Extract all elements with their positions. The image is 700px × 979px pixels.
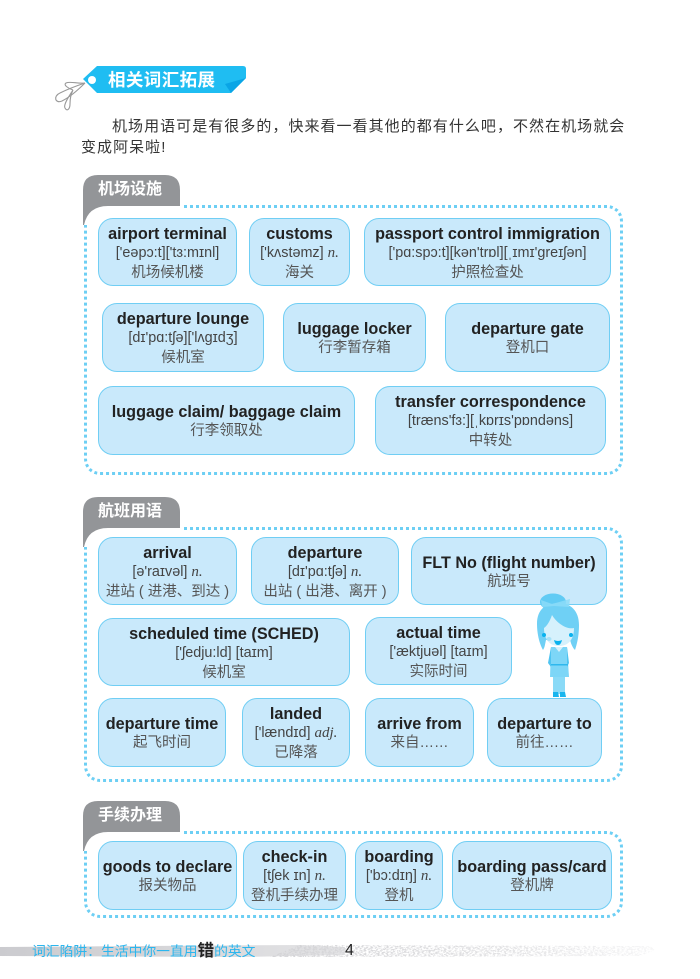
card: airport terminal — [98, 218, 237, 286]
tab: flight terms — [83, 497, 181, 547]
intro paragraph — [81, 118, 625, 156]
card: departure gate — [445, 303, 610, 372]
card: passport control immigration: 护照检查处 — [451, 265, 524, 281]
intro paragraph: 机场用语可是有很多的，快来看一看其他的都有什么吧，不然在机场就会 — [112, 118, 625, 135]
card: boarding: boarding — [364, 848, 434, 866]
card: check-in — [243, 841, 346, 910]
card: customs: customs — [266, 225, 333, 243]
card: scheduled time — [98, 618, 350, 686]
card: departure to: 前往…… — [516, 735, 574, 751]
footer brush stroke — [0, 945, 654, 957]
card: boarding: 登机 — [384, 888, 414, 904]
card: goods to declare — [98, 841, 237, 910]
tab: flight terms: 航班用语 — [98, 503, 162, 520]
card: transfer correspondence: transfer correspondence — [395, 393, 586, 411]
card: departure lounge: 候机室 — [161, 350, 205, 366]
card: luggage claim — [98, 386, 355, 455]
card: departure time — [98, 698, 226, 767]
card: check-in: check-in — [262, 848, 327, 866]
card: landed — [242, 698, 350, 767]
card: departure: 出站 ( 出港、离开 ) — [263, 584, 387, 600]
card: scheduled time: 候机室 — [202, 665, 246, 681]
card: arrive from: 来自…… — [390, 735, 448, 751]
card: arrival: arrival — [143, 544, 192, 562]
footer title: 词汇陷阱：生活中你一直用错的英文 — [32, 942, 255, 960]
card: boarding — [355, 841, 443, 910]
card: departure lounge: [dɪ'pɑ:tʃə]['lʌgɪdʒ] — [128, 330, 238, 346]
card: check-in: [tʃek ɪn] n. — [263, 868, 326, 884]
icon: flight attendant girl — [537, 594, 579, 697]
card: departure: [dɪ'pɑ:tʃə] n. — [288, 564, 362, 580]
card: passport control immigration: passport control immigration — [375, 225, 600, 243]
card: arrive from — [365, 698, 474, 767]
card: airport terminal: airport terminal — [108, 225, 227, 243]
card: luggage claim: 行李领取处 — [190, 423, 263, 439]
card: airport terminal: 机场候机楼 — [131, 265, 204, 281]
tab: airport facilities — [83, 175, 181, 225]
card: boarding pass/card: 登机牌 — [510, 878, 554, 894]
card: luggage locker: 行李暂存箱 — [318, 340, 391, 356]
card: luggage claim: luggage claim/ baggage claim — [112, 403, 341, 421]
card: passport control immigration — [364, 218, 611, 286]
card: FLT No — [411, 537, 607, 605]
card: luggage locker — [283, 303, 426, 372]
card: goods to declare: goods to declare — [103, 858, 232, 876]
card: departure to — [487, 698, 602, 767]
card: arrival — [98, 537, 237, 605]
tab: check-in procedures — [83, 801, 181, 851]
card: boarding: ['bɔ:dɪŋ] n. — [366, 868, 432, 884]
card: customs — [249, 218, 350, 286]
card: customs: 海关 — [285, 265, 314, 281]
card: actual time — [365, 617, 512, 685]
heading text: 相关词汇拓展 — [108, 70, 215, 90]
card: departure — [251, 537, 399, 605]
card: boarding pass/card — [452, 841, 612, 910]
card: departure: departure — [288, 544, 362, 562]
card: arrival: 进站 ( 进港、到达 ) — [106, 584, 229, 600]
card: transfer correspondence — [375, 386, 606, 455]
card: scheduled time: scheduled time (SCHED) — [129, 625, 319, 643]
card: departure lounge: departure lounge — [117, 310, 249, 328]
card: transfer correspondence: [træns'fɜ:][ˌkɒrɪs'pɒndəns] — [408, 413, 573, 429]
card: scheduled time: ['ʃedju:ld] [taɪm] — [175, 645, 273, 661]
intro paragraph: 变成阿呆啦! — [81, 139, 166, 156]
card: departure lounge — [102, 303, 264, 372]
card: arrive from: arrive from — [377, 715, 462, 733]
card: airport terminal: ['eəpɔ:t]['tɜ:mɪnl] — [116, 245, 219, 261]
card: landed: 已降落 — [274, 745, 318, 761]
card: departure to: departure to — [497, 715, 592, 733]
card: actual time: 实际时间 — [410, 664, 468, 680]
tab: airport facilities: 机场设施 — [98, 181, 162, 198]
card: passport control immigration: ['pɑ:spɔ:t][kən'trɒl][ˌɪmɪ'greɪʃən] — [388, 245, 586, 261]
card: goods to declare: 报关物品 — [138, 878, 196, 894]
card: FLT No: 航班号 — [487, 574, 531, 590]
card: actual time: actual time — [396, 624, 481, 642]
heading ribbon tag — [55, 66, 246, 110]
card: landed: landed — [270, 705, 322, 723]
panel: flight terms — [83, 497, 623, 782]
card: transfer correspondence: 中转处 — [469, 433, 512, 449]
card: check-in: 登机手续办理 — [251, 888, 338, 904]
card: departure time: departure time — [106, 715, 218, 733]
card: customs: ['kʌstəmz] n. — [260, 245, 339, 261]
card: FLT No: FLT No (flight number) — [422, 554, 596, 572]
card: departure gate: 登机口 — [506, 340, 549, 356]
card: landed: ['lændɪd] adj. — [255, 725, 337, 741]
card: boarding pass/card: boarding pass/card — [457, 858, 607, 876]
page number: 4 — [345, 942, 354, 959]
card: arrival: [ə'raɪvəl] n. — [132, 564, 203, 580]
card: departure time: 起飞时间 — [133, 735, 191, 751]
panel: airport facilities — [83, 175, 623, 475]
tab: check-in procedures: 手续办理 — [98, 807, 162, 824]
card: departure gate: departure gate — [471, 320, 584, 338]
panel: check-in procedures — [83, 801, 623, 918]
card: luggage locker: luggage locker — [297, 320, 412, 338]
card: actual time: ['æktjuəl] [taɪm] — [389, 644, 488, 660]
